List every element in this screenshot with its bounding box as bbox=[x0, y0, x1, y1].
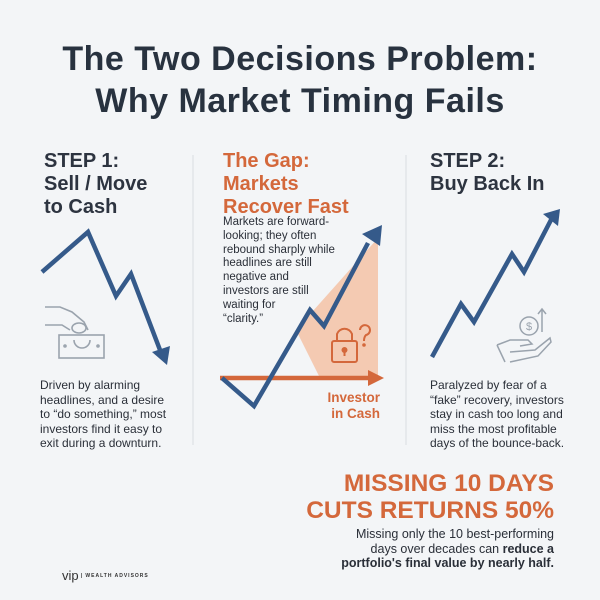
heading: step 1 bbox=[44, 150, 147, 218]
callout heading bbox=[306, 470, 554, 524]
chart: the gap recovery bbox=[220, 225, 384, 406]
icon: hand with coin: $ bbox=[526, 321, 532, 333]
label: investor in cash bbox=[327, 390, 380, 421]
text: step 1: Driven by alarming bbox=[40, 378, 140, 392]
text: the gap bbox=[223, 216, 335, 325]
title: The Two Decisions Problem: bbox=[62, 40, 538, 78]
text: step 2: stay in cash too long and bbox=[430, 407, 563, 421]
label: investor in cash: in Cash bbox=[331, 406, 380, 421]
text: step 1 bbox=[40, 378, 166, 450]
text: the gap: looking; they often bbox=[223, 230, 316, 242]
heading: step 2 bbox=[430, 150, 544, 195]
heading: step 2: STEP 2: bbox=[430, 150, 505, 172]
icon: hand with coin bbox=[497, 309, 551, 362]
icon: lock with question bbox=[332, 325, 370, 362]
text: step 1: to “do something,” most bbox=[40, 407, 166, 421]
heading: the gap bbox=[223, 150, 349, 218]
heading: the gap: Recover Fast bbox=[223, 196, 349, 218]
text: the gap: headlines are still bbox=[223, 257, 312, 269]
text: step 2 bbox=[430, 378, 564, 450]
text: the gap: “clarity.” bbox=[223, 313, 263, 325]
heading: the gap: Markets bbox=[223, 173, 299, 195]
text: step 2: days of the bounce-back. bbox=[430, 436, 564, 450]
callout text: portfolio's final value by nearly half. bbox=[341, 556, 554, 570]
chart: step 2 rise bbox=[432, 209, 560, 357]
chart: step 1 decline bbox=[42, 232, 170, 365]
heading: step 2: Buy Back In bbox=[430, 173, 544, 195]
title: Why Market Timing Fails bbox=[95, 82, 505, 120]
text: the gap: rebound sharply while bbox=[223, 244, 335, 256]
panel: the gap bbox=[223, 150, 349, 325]
callout heading: CUTS RETURNS 50% bbox=[306, 497, 554, 524]
panel: step 2 bbox=[430, 150, 564, 450]
text: step 1: headlines, and a desire bbox=[40, 392, 164, 406]
heading: step 1: STEP 1: bbox=[44, 150, 119, 172]
heading: the gap: The Gap: bbox=[223, 150, 310, 172]
panel: step 1 bbox=[40, 150, 166, 450]
icon: hand with money bbox=[45, 307, 104, 358]
text: step 2: Paralyzed by fear of a bbox=[430, 378, 547, 392]
callout text bbox=[341, 527, 554, 570]
logo: vip | WEALTH ADVISORS bbox=[62, 568, 149, 583]
text: the gap: negative and bbox=[223, 271, 289, 283]
text: step 2: miss the most profitable bbox=[430, 422, 557, 436]
text: the gap: Markets are forward- bbox=[223, 216, 329, 228]
text: the gap: waiting for bbox=[223, 299, 275, 311]
text: the gap: investors are still bbox=[223, 285, 309, 297]
callout heading: MISSING 10 DAYS bbox=[344, 470, 554, 497]
callout text: days over decades can reduce a bbox=[371, 542, 554, 556]
text: step 1: exit during a downturn. bbox=[40, 436, 161, 450]
text: step 1: investors find it easy to bbox=[40, 422, 162, 436]
callout: missing 10 days bbox=[306, 470, 554, 570]
title bbox=[62, 40, 538, 120]
label: investor in cash: Investor bbox=[327, 390, 380, 405]
heading: step 1: Sell / Move bbox=[44, 173, 147, 195]
text: step 2: “fake” recovery, investors bbox=[430, 392, 564, 406]
heading: step 1: to Cash bbox=[44, 196, 117, 218]
callout text: Missing only the 10 best-performing bbox=[356, 527, 554, 541]
